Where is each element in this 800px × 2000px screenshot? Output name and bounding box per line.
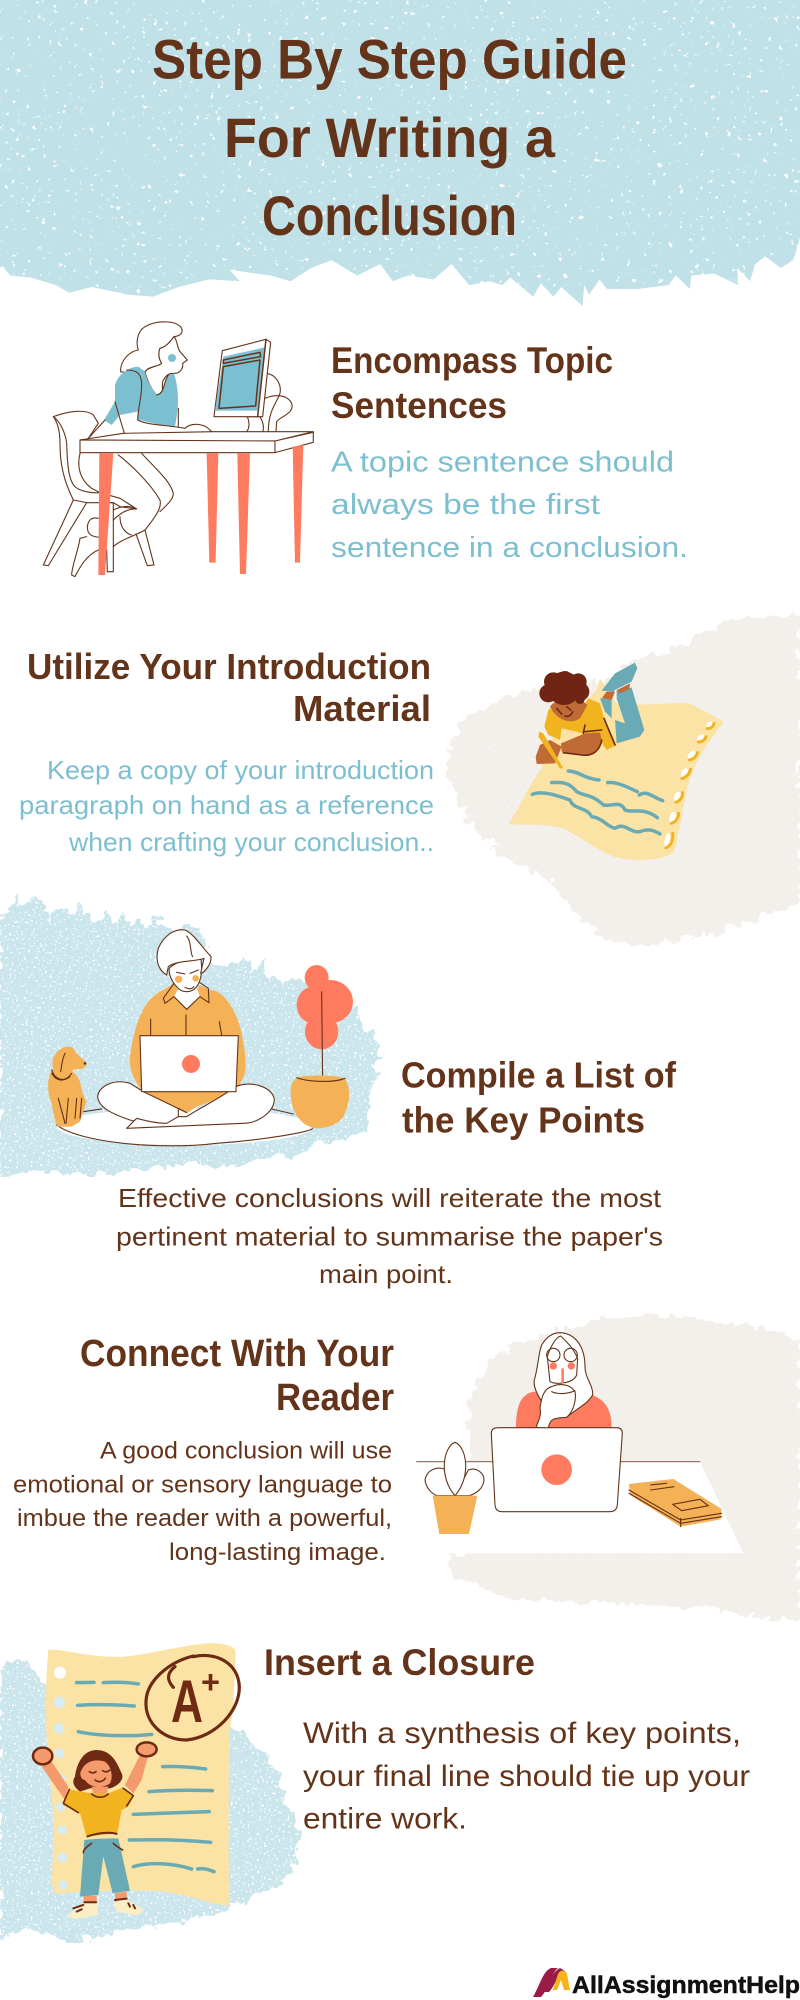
illustration: person with laptop, dog and plant: [48, 930, 353, 1146]
body text: paragraph on hand as a reference: [19, 790, 434, 820]
logo: [533, 1968, 800, 1999]
title: Step By Step Guide: [152, 28, 627, 90]
body text: pertinent material to summarise the paper's: [116, 1222, 663, 1252]
body text: emotional or sensory language to: [13, 1472, 392, 1498]
body text: [116, 1183, 663, 1289]
icon: logo mark: [533, 1968, 570, 1997]
heading: Utilize Your Introduction: [27, 646, 431, 687]
icon: A+ grade: +: [201, 1664, 220, 1700]
title: [152, 28, 627, 247]
heading: [27, 646, 431, 729]
body text: main point.: [319, 1259, 453, 1289]
panel: compile a list of the key points: [0, 893, 677, 1289]
icon: A+ grade: A: [171, 1668, 203, 1735]
panel: utilize your introduction material: [19, 613, 800, 946]
body text: entire work.: [303, 1802, 467, 1836]
heading: the Key Points: [402, 1100, 645, 1140]
banner background: speckled torn edge: [0, 0, 800, 306]
body text: [13, 1438, 392, 1566]
heading: Insert a Closure: [264, 1642, 535, 1683]
background blob: beige: [446, 613, 800, 946]
body text: always be the first: [331, 489, 600, 521]
background blob: beige: [449, 1313, 800, 1621]
panel: connect with your reader: [13, 1313, 800, 1621]
panel: title banner: [0, 0, 800, 306]
body text: imbue the reader with a powerful,: [17, 1505, 392, 1532]
illustration: graded paper and cheering girl: [33, 1643, 239, 1919]
body text: [303, 1717, 750, 1836]
body text: Effective conclusions will reiterate the most: [118, 1183, 662, 1213]
body text: With a synthesis of key points,: [303, 1717, 741, 1750]
panel: insert a closure: [0, 1642, 750, 1943]
body text: A good conclusion will use: [100, 1438, 392, 1464]
brand name: AllAssignmentHelp: [572, 1972, 800, 1999]
heading: Encompass Topic: [331, 340, 613, 381]
illustration: woman at laptop with plant and books: [417, 1333, 743, 1553]
body text: sentence in a conclusion.: [331, 532, 688, 564]
title: Conclusion: [262, 184, 517, 247]
body text: Keep a copy of your introduction: [47, 755, 434, 785]
title: For Writing a: [224, 106, 556, 169]
heading: Sentences: [331, 385, 507, 426]
body text: [331, 446, 688, 564]
panel: encompass topic sentences: [43, 322, 688, 577]
heading: [331, 340, 613, 426]
heading: [401, 1054, 677, 1140]
body text: [19, 755, 434, 857]
body text: A topic sentence should: [331, 446, 674, 478]
illustration: child writing on paper: [508, 663, 724, 860]
body text: your final line should tie up your: [303, 1760, 750, 1793]
heading: [80, 1333, 394, 1419]
heading: Connect With Your: [80, 1333, 394, 1375]
heading: Compile a List of: [401, 1054, 677, 1096]
heading: Material: [293, 688, 431, 729]
body text: when crafting your conclusion..: [68, 827, 434, 857]
illustration: woman at computer desk: [43, 322, 313, 577]
heading: Reader: [276, 1377, 394, 1419]
background blob: blue: [0, 893, 383, 1177]
background blob: blue: [0, 1659, 301, 1943]
body text: long-lasting image.: [169, 1539, 386, 1566]
